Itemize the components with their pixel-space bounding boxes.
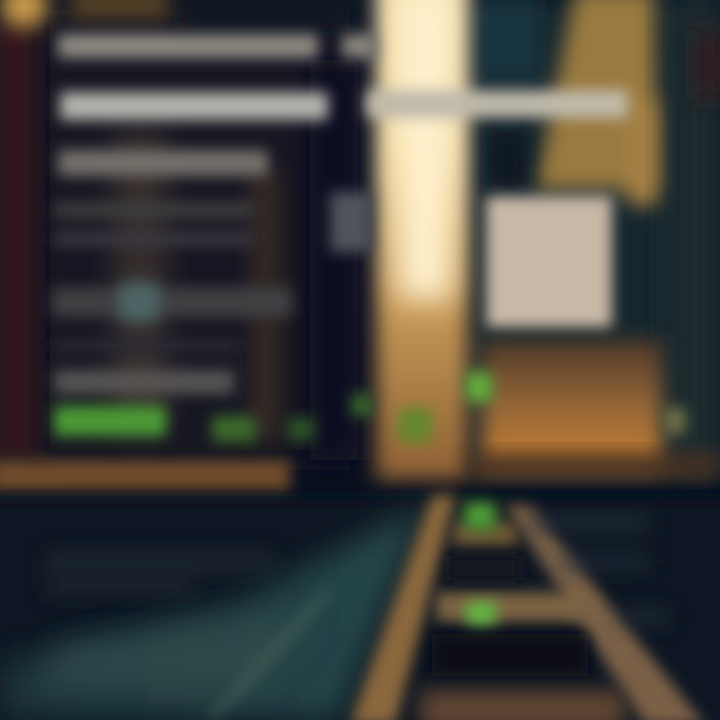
panel: lower dark area bbox=[0, 500, 720, 720]
text block: blurred body lines bbox=[52, 150, 372, 394]
icons: green highlights bbox=[54, 372, 686, 624]
panel: left bookcase bbox=[0, 0, 360, 460]
panel: wooden shelf bbox=[0, 454, 720, 492]
text block: lower right faint lines bbox=[530, 515, 670, 624]
panel: cream window bbox=[486, 196, 612, 328]
panel: warm floor in alcove bbox=[482, 340, 662, 470]
panel: teal floor bbox=[0, 505, 425, 720]
panel: wooden tracks bbox=[350, 495, 705, 720]
heading: blurred title lines bbox=[58, 34, 628, 120]
panel: central light beam bbox=[376, 0, 468, 480]
text block: lower left faint lines bbox=[45, 552, 275, 594]
panel: right alcove bbox=[470, 0, 720, 480]
